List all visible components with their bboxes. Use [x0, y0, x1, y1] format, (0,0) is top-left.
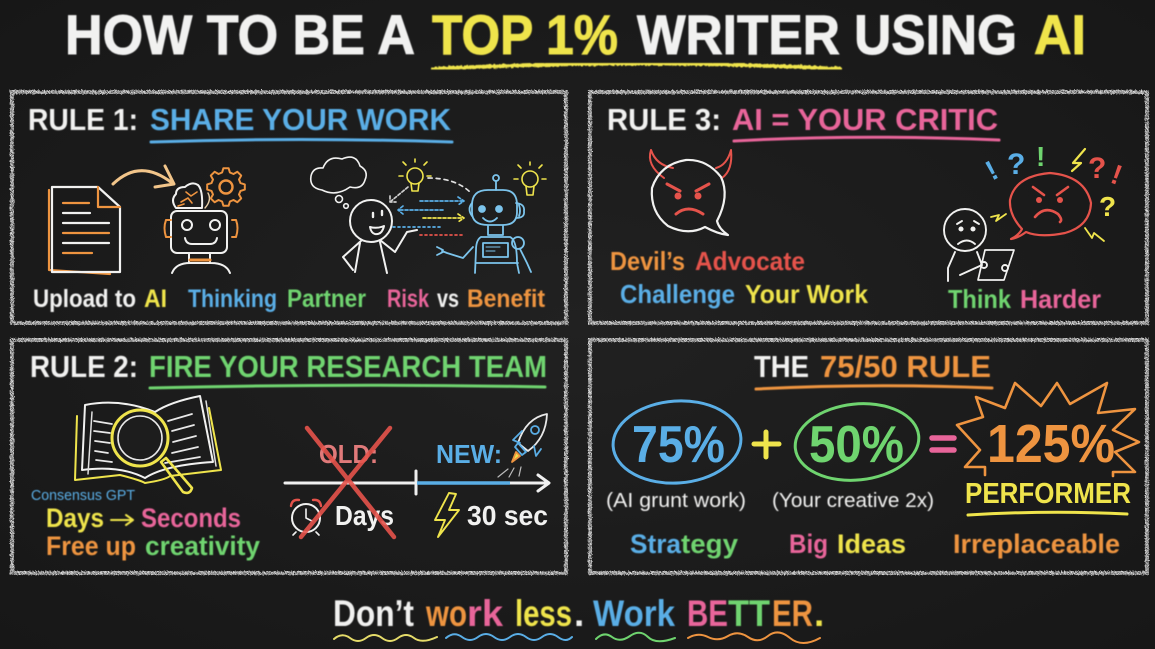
heading: 75/50 rule: 75/50 RULE: [820, 349, 991, 384]
equation: plus: [754, 432, 779, 457]
captions: equation notes: Ideas: [837, 529, 906, 559]
title: AI: [1034, 3, 1086, 66]
icon: worried stick figure: [944, 209, 1014, 281]
title: TOP 1%: [432, 3, 618, 66]
icon: blue robot: [437, 175, 531, 273]
title: WRITER USING: [637, 3, 1017, 66]
footer tagline: less: [515, 593, 572, 634]
icon: red cross: [301, 428, 394, 537]
footer tagline: TT: [728, 593, 770, 634]
footer tagline: wo: [425, 593, 467, 634]
captions: equation notes: (AI grunt work): [606, 490, 746, 512]
footer tagline: rk: [467, 593, 503, 634]
panel: rule 3 ai critic: [590, 92, 1147, 323]
caption: devil's advocate: [610, 246, 869, 309]
caption: rule 1 labels: Benefit: [467, 285, 546, 313]
icon: symbols around the bubble: ?: [1007, 148, 1025, 181]
icon: robot with brain and gear: [164, 168, 245, 273]
caption: devil's advocate: Challenge: [620, 279, 735, 309]
caption: devil's advocate: Your Work: [745, 279, 869, 309]
footer tagline: BE: [687, 593, 728, 634]
footer tagline: .: [814, 593, 824, 634]
icon: open book: [75, 396, 221, 483]
panel: rule 2 fire your research team: [12, 340, 566, 573]
heading: rule 1: RULE 1:: [28, 102, 138, 137]
squiggle underlines: [334, 632, 820, 643]
footer tagline: Don’t: [333, 593, 414, 634]
panel: the 75/50 rule: [590, 340, 1147, 573]
caption: devil's advocate: Devil’s: [610, 246, 685, 276]
footer tagline: Work: [593, 593, 675, 634]
caption: think harder: Think: [948, 284, 1011, 314]
icon: thought cloud: [311, 157, 366, 208]
icon: angry speech bubble: [1010, 173, 1091, 239]
heading: rule 2: FIRE YOUR RESEARCH TEAM: [149, 349, 547, 384]
heading: rule 1: [28, 102, 452, 142]
caption: consensus and days to seconds: [31, 487, 260, 561]
caption: rule 1 labels: Thinking: [188, 285, 277, 313]
captions: equation notes: [606, 490, 1120, 559]
heading: rule 2: [30, 349, 547, 388]
caption: think harder: [948, 284, 1101, 314]
captions: equation notes: (Your creative 2x): [772, 490, 934, 512]
label: performer: PERFORMER: [965, 478, 1131, 510]
equation: equals: [932, 438, 954, 450]
chart: old vs new timeline: OLD:: [319, 439, 378, 469]
captions: equation notes: Big: [789, 529, 828, 559]
caption: rule 1 labels: Upload to: [33, 285, 136, 313]
caption: rule 1 labels: AI: [144, 285, 167, 313]
footer tagline: [333, 593, 824, 643]
title: HOW TO BE A: [65, 3, 415, 66]
footer tagline: .: [574, 593, 584, 634]
heading: rule 3: AI = YOUR CRITIC: [732, 102, 998, 137]
icon: symbols around the bubble: ?: [1099, 191, 1116, 222]
equation: 125 percent burst: [957, 383, 1139, 476]
arrow: upload: [113, 166, 174, 187]
captions: equation notes: Irreplaceable: [953, 529, 1120, 559]
captions: equation notes: tegy: [681, 529, 738, 559]
icon: rocket: [498, 414, 547, 477]
icon: symbols around the bubble: !: [1107, 159, 1126, 191]
chart: old vs new timeline: NEW:: [436, 439, 502, 469]
icon: alarm clock: [291, 500, 321, 535]
icon: idea bulbs: [399, 159, 546, 195]
caption: rule 1 labels: [33, 285, 546, 313]
icon: lightning bolt: [435, 493, 459, 537]
heading: rule 3: RULE 3:: [607, 102, 721, 137]
title: [65, 3, 1086, 69]
heading: rule 1: SHARE YOUR WORK: [150, 102, 452, 137]
chart: old vs new timeline: Days: [335, 500, 394, 531]
caption: consensus and days to seconds: Days: [46, 503, 104, 533]
heading: rule 3: [607, 102, 999, 141]
heading: 75/50 rule: [754, 349, 992, 389]
panel: rule 1 share your work: [12, 92, 566, 323]
caption: think harder: Harder: [1020, 284, 1101, 314]
icon: document: [49, 187, 120, 274]
caption: rule 1 labels: Partner: [287, 285, 366, 313]
captions: equation notes: Stra: [630, 529, 682, 559]
icon: symbols around the bubble: !: [980, 155, 1003, 186]
arrows: exchange: [390, 178, 470, 235]
icon: magnifying glass: [112, 410, 192, 493]
caption: rule 1 labels: Risk: [387, 285, 429, 313]
chart: old vs new timeline: 30 sec: [467, 500, 548, 531]
heading: 75/50 rule: THE: [754, 349, 809, 384]
icon: symbols around the bubble: !: [1036, 141, 1045, 172]
caption: rule 1 labels: vs: [437, 285, 459, 313]
icon: stick figure: [343, 200, 417, 273]
equation: 125 percent burst: 125%: [987, 414, 1115, 474]
icon: symbols around the bubble: ?: [1088, 152, 1106, 185]
caption: consensus and days to seconds: Free up: [46, 531, 136, 561]
footer tagline: ER: [772, 593, 813, 634]
equation: 75 percent: 75%: [632, 416, 725, 474]
caption: consensus and days to seconds: Consensus GPT: [31, 487, 135, 504]
equation: 50 percent: [791, 398, 923, 486]
heading: rule 2: RULE 2:: [30, 349, 138, 384]
equation: 50 percent: 50%: [809, 416, 904, 474]
caption: consensus and days to seconds: Seconds: [141, 503, 241, 533]
chart: old vs new timeline: [285, 414, 549, 537]
caption: consensus and days to seconds: creativity: [145, 531, 260, 561]
caption: devil's advocate: Advocate: [695, 246, 805, 276]
icon: symbols around the bubble: [980, 141, 1126, 241]
icon: devil speech bubble: [650, 150, 731, 235]
equation: 75 percent: [610, 397, 744, 487]
